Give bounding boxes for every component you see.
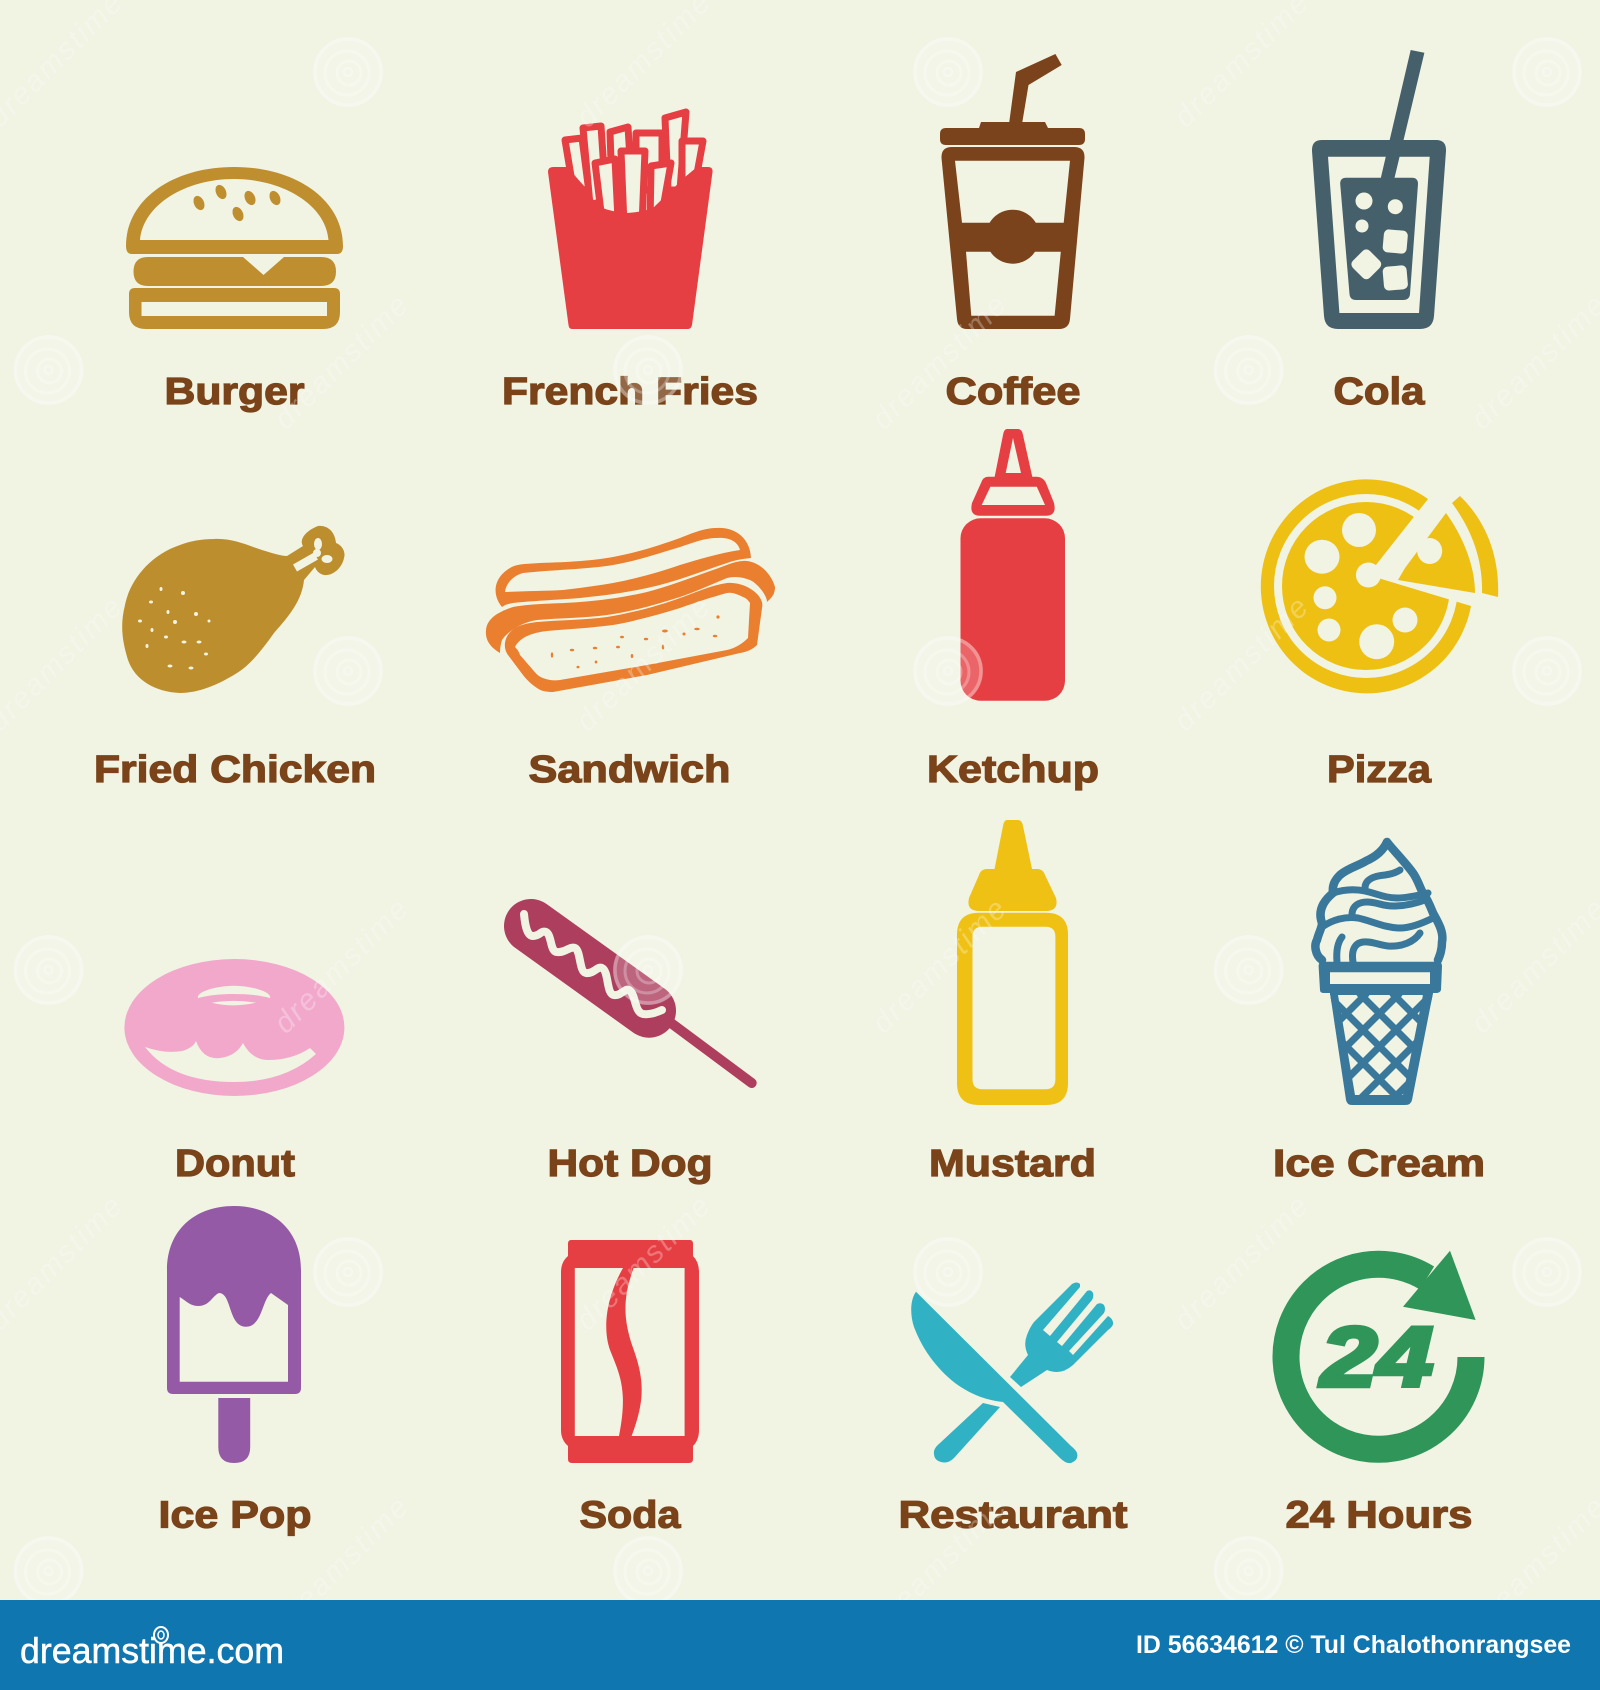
- icon: coffee cup: [940, 54, 1085, 329]
- icon: ice cream cone: [1311, 838, 1447, 1105]
- footer logo text: dreamstime.com: [20, 1630, 284, 1671]
- icon: logo swirl: [154, 1627, 168, 1643]
- panel: french fries: [502, 112, 758, 413]
- label: French Fries: French Fries: [502, 371, 758, 413]
- label: Pizza: Pizza: [1327, 749, 1432, 791]
- footer credit text: ID 56634612 © Tul Chalothonrangsee: [1136, 1631, 1571, 1659]
- text: dreamstime: [1168, 591, 1315, 738]
- label: Cola: Cola: [1334, 371, 1425, 413]
- icon: 24 hour arrow: 24: [1319, 1310, 1433, 1404]
- icon: soda can: [561, 1240, 699, 1463]
- text: dreamstime: [268, 1491, 415, 1638]
- text: dreamstime: [866, 893, 1013, 1040]
- label: Sandwich: Sandwich: [528, 749, 730, 791]
- panel: ice pop: [158, 1206, 312, 1536]
- icon: french fries: [548, 112, 713, 329]
- text: dreamstime: [1168, 1190, 1315, 1337]
- icon: ketchup bottle: [960, 429, 1065, 701]
- panel: sandwich: [486, 528, 775, 791]
- text: dreamstime: [268, 289, 415, 436]
- label: Ice Cream: Ice Cream: [1273, 1143, 1485, 1185]
- panel: 24 hours: [1286, 1251, 1476, 1536]
- icon: ice pop: [167, 1206, 301, 1463]
- text: dreamstime: [866, 289, 1013, 436]
- icon: chicken drumstick: [122, 526, 345, 693]
- label: Mustard: Mustard: [929, 1143, 1096, 1185]
- label: Coffee: Coffee: [946, 371, 1080, 413]
- label: Ice Pop: Ice Pop: [158, 1494, 312, 1536]
- icon: mustard bottle: [957, 820, 1068, 1105]
- panel: pizza: [1261, 479, 1498, 791]
- label: Fried Chicken: Fried Chicken: [94, 749, 376, 791]
- icon: donut: [124, 959, 344, 1096]
- label: Restaurant: Restaurant: [898, 1494, 1128, 1536]
- icon: cola glass: [1312, 50, 1446, 329]
- panel: hot dog: [524, 914, 752, 1185]
- footer bar: [0, 1600, 1600, 1690]
- text: dreamstime: [570, 1190, 717, 1337]
- icon: hot dog sandwich: [486, 528, 775, 692]
- icon: corn dog on a stick: [524, 914, 752, 1083]
- panel: restaurant: [898, 1282, 1128, 1536]
- text: dreamstime: [866, 1491, 1013, 1638]
- icon: knife and fork: [911, 1282, 1113, 1463]
- panel: coffee: [940, 54, 1085, 413]
- label: Soda: Soda: [580, 1494, 681, 1536]
- panel: soda: [561, 1240, 699, 1536]
- panel: ice cream: [1275, 838, 1483, 1178]
- label: Donut: Donut: [175, 1143, 295, 1185]
- icon: burger: [126, 167, 343, 329]
- panel: mustard: [929, 820, 1096, 1185]
- label: Ketchup: Ketchup: [927, 749, 1099, 791]
- panel: cola: [1312, 50, 1446, 413]
- panel: donut: [124, 959, 344, 1185]
- panel: ketchup: [927, 429, 1099, 791]
- label: Burger: Burger: [164, 371, 305, 413]
- label: 24 Hours: 24 Hours: [1286, 1494, 1472, 1536]
- panel: burger: [126, 167, 343, 413]
- panel: fried chicken: [94, 526, 376, 791]
- icon: 24 hour arrow: [1286, 1251, 1476, 1449]
- icon: pizza with slice: [1261, 479, 1498, 693]
- label: Hot Dog: Hot Dog: [548, 1143, 712, 1185]
- text: dreamstime: [570, 591, 717, 738]
- text: dreamstime: [268, 893, 415, 1040]
